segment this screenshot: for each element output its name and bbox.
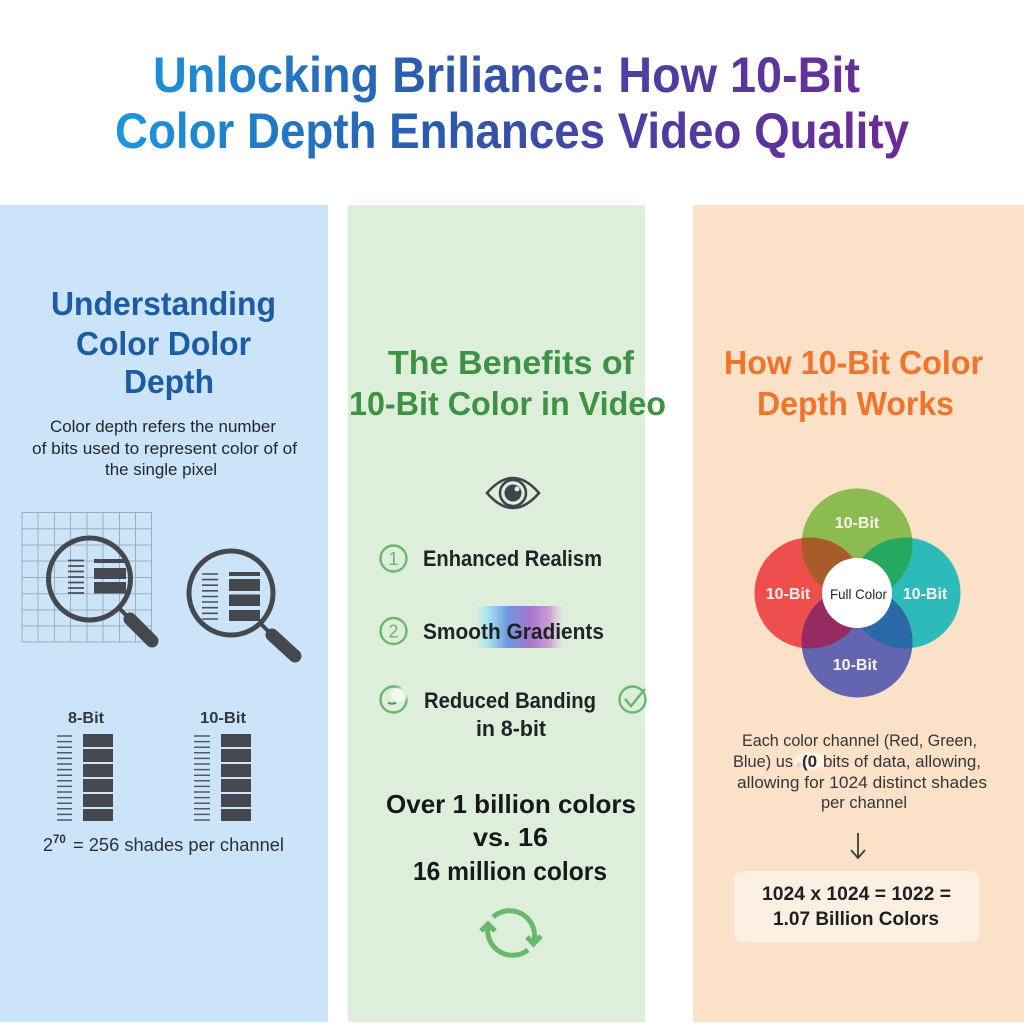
text: definition: Color depth refers the number: [50, 417, 276, 436]
chart: four-channel venn diagram: Full Color: [830, 586, 887, 602]
title: Color Depth Enhances Video Quality: [115, 103, 909, 159]
benefit 3: reduced banding: [380, 686, 596, 741]
label: 10-bit: 10-Bit: [200, 710, 246, 727]
heading: understanding color depth: Depth: [124, 363, 214, 400]
text: channel explanation: allowing for 1024 distinct shades: [737, 774, 987, 792]
heading: benefits: The Benefits of: [388, 344, 635, 381]
callout: total colors: [734, 871, 979, 942]
text: shades per channel formula: 70: [53, 834, 66, 846]
text: definition: of bits used to represent color of of: [32, 439, 297, 458]
heading: understanding color depth: Color Dolor: [76, 325, 251, 362]
text: color count comparison: 16 million colors: [413, 856, 607, 886]
chart: four-channel venn diagram: 10-Bit: [903, 586, 948, 603]
benefit 2: smooth gradients: 2: [388, 622, 399, 642]
text: channel explanation: (0: [802, 752, 817, 771]
text: color count comparison: Over 1 billion colors: [386, 789, 636, 819]
benefit 3: reduced banding: Reduced Banding: [424, 688, 596, 713]
heading: how it works: How 10-Bit Color: [724, 344, 983, 381]
heading: benefits: [349, 344, 666, 422]
chart: 8-bit shades: [57, 734, 113, 821]
text: channel explanation: Each color channel (Red, Green,: [742, 732, 977, 750]
heading: benefits: 10-Bit Color in Video: [349, 385, 666, 422]
text: color count comparison: vs. 16: [473, 822, 548, 852]
callout: total colors: 1.07 Billion Colors: [773, 909, 939, 930]
benefit 3: reduced banding: in 8-bit: [476, 716, 547, 741]
label: 8-bit: 8-Bit: [68, 710, 104, 727]
icon: refresh arrows: [481, 911, 541, 955]
panel: benefits of 10-bit color: [348, 205, 666, 1022]
text: color count comparison: [386, 789, 636, 886]
heading: understanding color depth: [51, 285, 276, 400]
arrow: down: [851, 833, 865, 858]
text: definition: [32, 417, 297, 479]
chart: four-channel venn diagram: 10-Bit: [766, 586, 811, 603]
title: [115, 47, 909, 159]
text: channel explanation: [733, 732, 987, 812]
icon: eye: [487, 478, 539, 508]
panel: how 10-bit color works: [693, 205, 1024, 1022]
panel: understanding color depth: [0, 205, 328, 1022]
text: channel explanation: per channel: [821, 794, 907, 812]
benefit 1: enhanced realism: Enhanced Realism: [423, 546, 602, 571]
title: Unlocking Briliance: How 10-Bit: [153, 47, 860, 103]
heading: understanding color depth: Understanding: [51, 285, 276, 322]
benefit 2: smooth gradients: Smooth Gradients: [423, 619, 604, 644]
callout: total colors: 1024 x 1024 = 1022 =: [762, 884, 951, 905]
text: channel explanation: Blue) us: [733, 753, 793, 771]
icon: check mark: [620, 686, 646, 712]
chart: four-channel venn diagram: 10-Bit: [835, 515, 880, 532]
text: channel explanation: bits of data, allowing,: [823, 753, 981, 771]
text: shades per channel formula: 2: [43, 835, 53, 855]
icon: pixel grid with magnifier: [22, 512, 152, 642]
benefit 2: smooth gradients: [380, 606, 604, 648]
chart: four-channel venn diagram: 10-Bit: [833, 657, 878, 674]
chart: 10-bit shades: [194, 734, 251, 821]
text: definition: the single pixel: [105, 460, 217, 479]
text: shades per channel formula: = 256 shades per channel: [73, 835, 284, 855]
chart: four-channel venn diagram: [754, 488, 960, 698]
icon: magnifier over shade bars: [189, 551, 295, 656]
heading: how it works: Depth Works: [757, 385, 954, 422]
heading: how it works: [724, 344, 983, 422]
benefit 1: enhanced realism: 1: [388, 549, 399, 569]
